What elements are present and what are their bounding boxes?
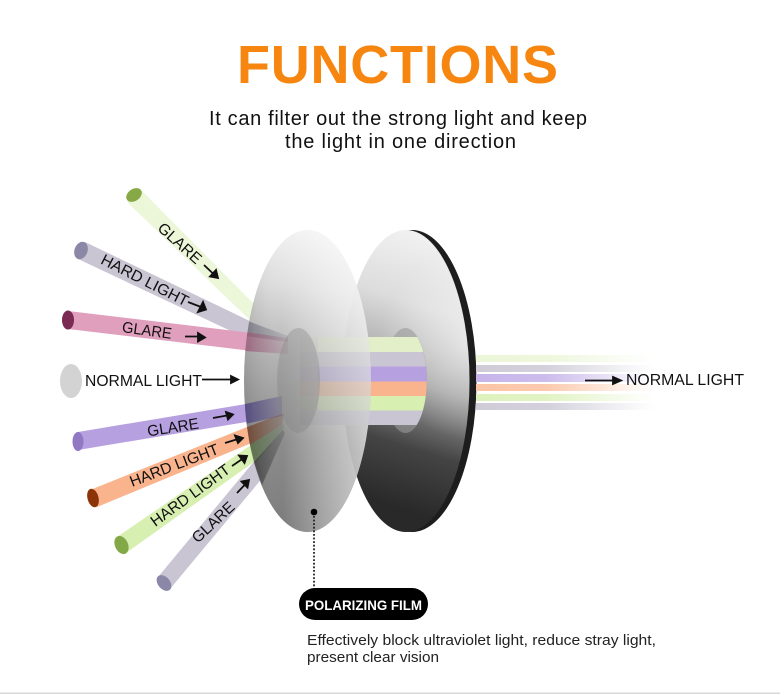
arrow: pink glare	[185, 333, 205, 342]
arrow: green glare	[204, 265, 218, 278]
description text: Effectively block ultraviolet light, reduce stray light,	[307, 633, 656, 649]
label: normal light, right: NORMAL LIGHT	[626, 372, 745, 389]
label: glare, pink beam: GLARE	[121, 319, 173, 343]
beam: green hard light	[112, 443, 258, 556]
beams seen through front lens	[245, 320, 288, 485]
title: FUNCTIONS	[237, 35, 558, 95]
arrow: gray glare	[237, 480, 249, 493]
beam: green glare	[124, 185, 256, 322]
pill: polarizing film	[299, 588, 428, 620]
icon: normal light source	[60, 364, 82, 398]
beam: gray hard light	[72, 240, 254, 340]
subtitle	[209, 108, 587, 153]
inner circle of front lens	[277, 328, 320, 433]
beam: purple glare	[72, 403, 252, 451]
leader line from front lens to pill	[311, 509, 317, 588]
beam: pink glare	[62, 310, 252, 351]
outgoing light beams	[476, 350, 658, 414]
arrow: orange hard light	[225, 436, 243, 443]
subtitle: It can filter out the strong light and keep	[209, 108, 587, 130]
label: hard light, orange beam: HARD LIGHT	[127, 441, 222, 491]
light tube tint through front lens	[318, 352, 371, 410]
incoming light beams	[62, 185, 264, 594]
description text: present clear vision	[307, 650, 439, 666]
back lens	[342, 230, 476, 532]
light tube between lenses	[300, 337, 430, 425]
label: normal light, left: NORMAL LIGHT	[85, 373, 203, 390]
label: hard light, gray beam: HARD LIGHT	[98, 252, 192, 311]
subtitle: the light in one direction	[285, 131, 516, 153]
arrow: normal light, left	[202, 376, 238, 383]
label: hard light, green beam: HARD LIGHT	[148, 461, 234, 530]
arrow: gray hard light	[188, 302, 206, 312]
pill: polarizing film: POLARIZING FILM	[305, 597, 422, 613]
arrow: normal light, right	[585, 377, 621, 384]
front lens	[244, 230, 371, 532]
arrow: green hard light	[232, 456, 247, 466]
label: glare, gray beam: GLARE	[189, 499, 238, 547]
beam: orange hard light	[85, 425, 254, 509]
label: glare, purple beam: GLARE	[146, 416, 200, 440]
arrow: purple glare	[213, 412, 233, 420]
label: glare, green beam: GLARE	[154, 220, 205, 268]
beam: gray glare	[154, 459, 264, 594]
description text	[307, 633, 656, 666]
